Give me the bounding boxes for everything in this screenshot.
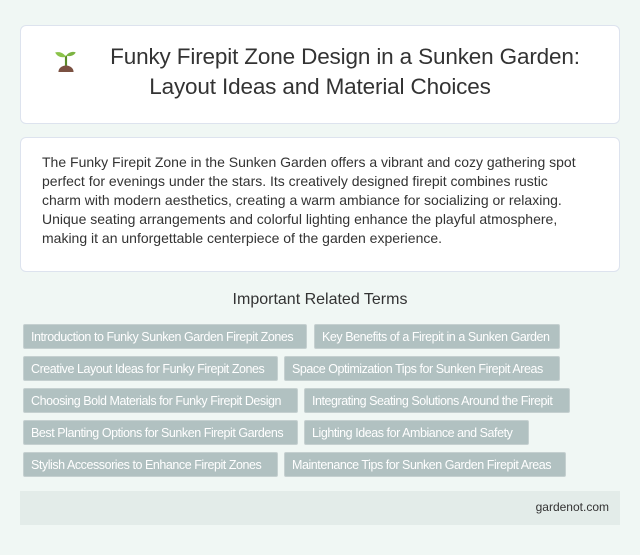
header card	[20, 25, 620, 124]
tags: Key Benefits of a Firepit in a Sunken Garden	[322, 330, 550, 344]
title	[110, 44, 580, 99]
header card: Layout Ideas and Material Choices	[149, 74, 491, 99]
tags: Creative Layout Ideas for Funky Firepit Zones	[31, 362, 264, 376]
tags: Lighting Ideas for Ambiance and Safety	[312, 426, 512, 440]
tags: Integrating Seating Solutions Around the Firepit	[312, 394, 552, 408]
icon: sprout	[55, 52, 76, 72]
heading: related terms: Important Related Terms	[233, 291, 407, 308]
tags: Introduction to Funky Sunken Garden Firepit Zones	[31, 330, 293, 344]
tags: Stylish Accessories to Enhance Firepit Zones	[31, 458, 261, 472]
footer	[20, 491, 620, 525]
footer text: gardenot.com	[536, 500, 609, 514]
tags: Best Planting Options for Sunken Firepit Gardens	[31, 426, 283, 440]
description card	[20, 137, 620, 272]
tags: Maintenance Tips for Sunken Garden Firepit Areas	[292, 458, 551, 472]
tags: Space Optimization Tips for Sunken Firepit Areas	[292, 362, 543, 376]
description text: The Funky Firepit Zone in the Sunken Garden offers a vibrant and cozy gathering spot perfect for evenings under the stars. Its creatively designed firepit combines rustic charm with modern aesthetics, creating a warm ambiance for socializing or relaxing. Unique seating arrangements and colorful lighting enhance the playful atmosphere, making it an unforgettable centerpiece of the garden experience.	[42, 154, 576, 246]
tags	[23, 324, 570, 477]
tags: Choosing Bold Materials for Funky Firepit Design	[31, 394, 281, 408]
header card: Funky Firepit Zone Design in a Sunken Garden:	[110, 44, 580, 69]
